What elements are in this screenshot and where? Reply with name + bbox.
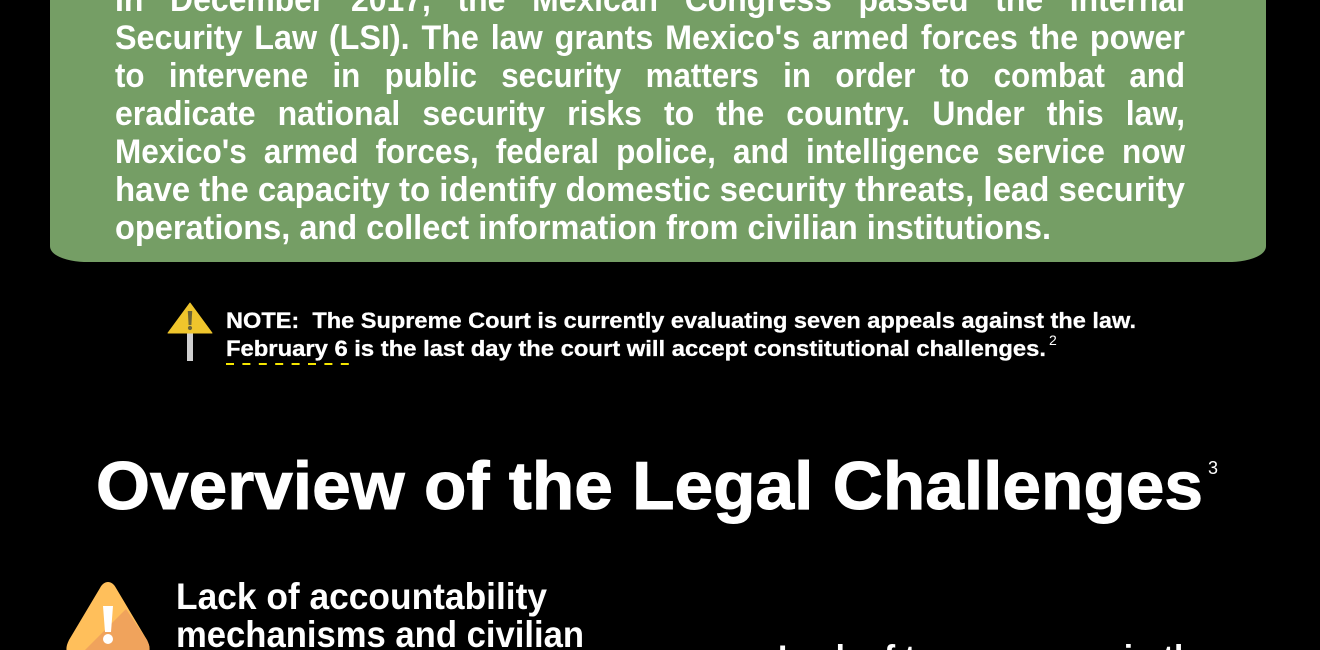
callout: Supreme Court note: 2 xyxy=(1049,332,1057,348)
text block: law description: Mexico's armed forces, federal police, and intelligence service now xyxy=(115,133,1186,171)
heading: lack of accountability challenge xyxy=(176,576,584,650)
text block: law description: to intervene in public security matters in order to combat and xyxy=(115,57,1185,95)
callout: Supreme Court note: NOTE: The Supreme Court is currently evaluating seven appeals against the law. xyxy=(226,308,1136,333)
heading: lack of accountability challenge: Lack of accountability xyxy=(176,576,547,617)
callout: Supreme Court note xyxy=(226,308,1136,364)
icon: warning sign xyxy=(168,303,212,361)
text block: law description: Security Law (LSI). The law grants Mexico's armed forces the power xyxy=(115,19,1185,57)
icon: alert triangle xyxy=(66,582,150,650)
text block: law description: eradicate national security risks to the country. Under this law, xyxy=(115,95,1185,133)
text block: law description: have the capacity to identify domestic security threats, lead security xyxy=(115,171,1185,209)
text block: law description: operations, and collect information from civilian institutions. xyxy=(115,209,1051,247)
heading: Overview of the Legal Challenges: 3 xyxy=(1208,458,1218,478)
panel: Internal Security Law summary xyxy=(50,0,1266,262)
text block: law description xyxy=(115,0,1186,247)
heading: Overview of the Legal Challenges: Overview of the Legal Challenges xyxy=(96,448,1203,524)
callout: Supreme Court note: February 6 is the last day the court will accept constitutional challenges. xyxy=(226,336,1046,361)
